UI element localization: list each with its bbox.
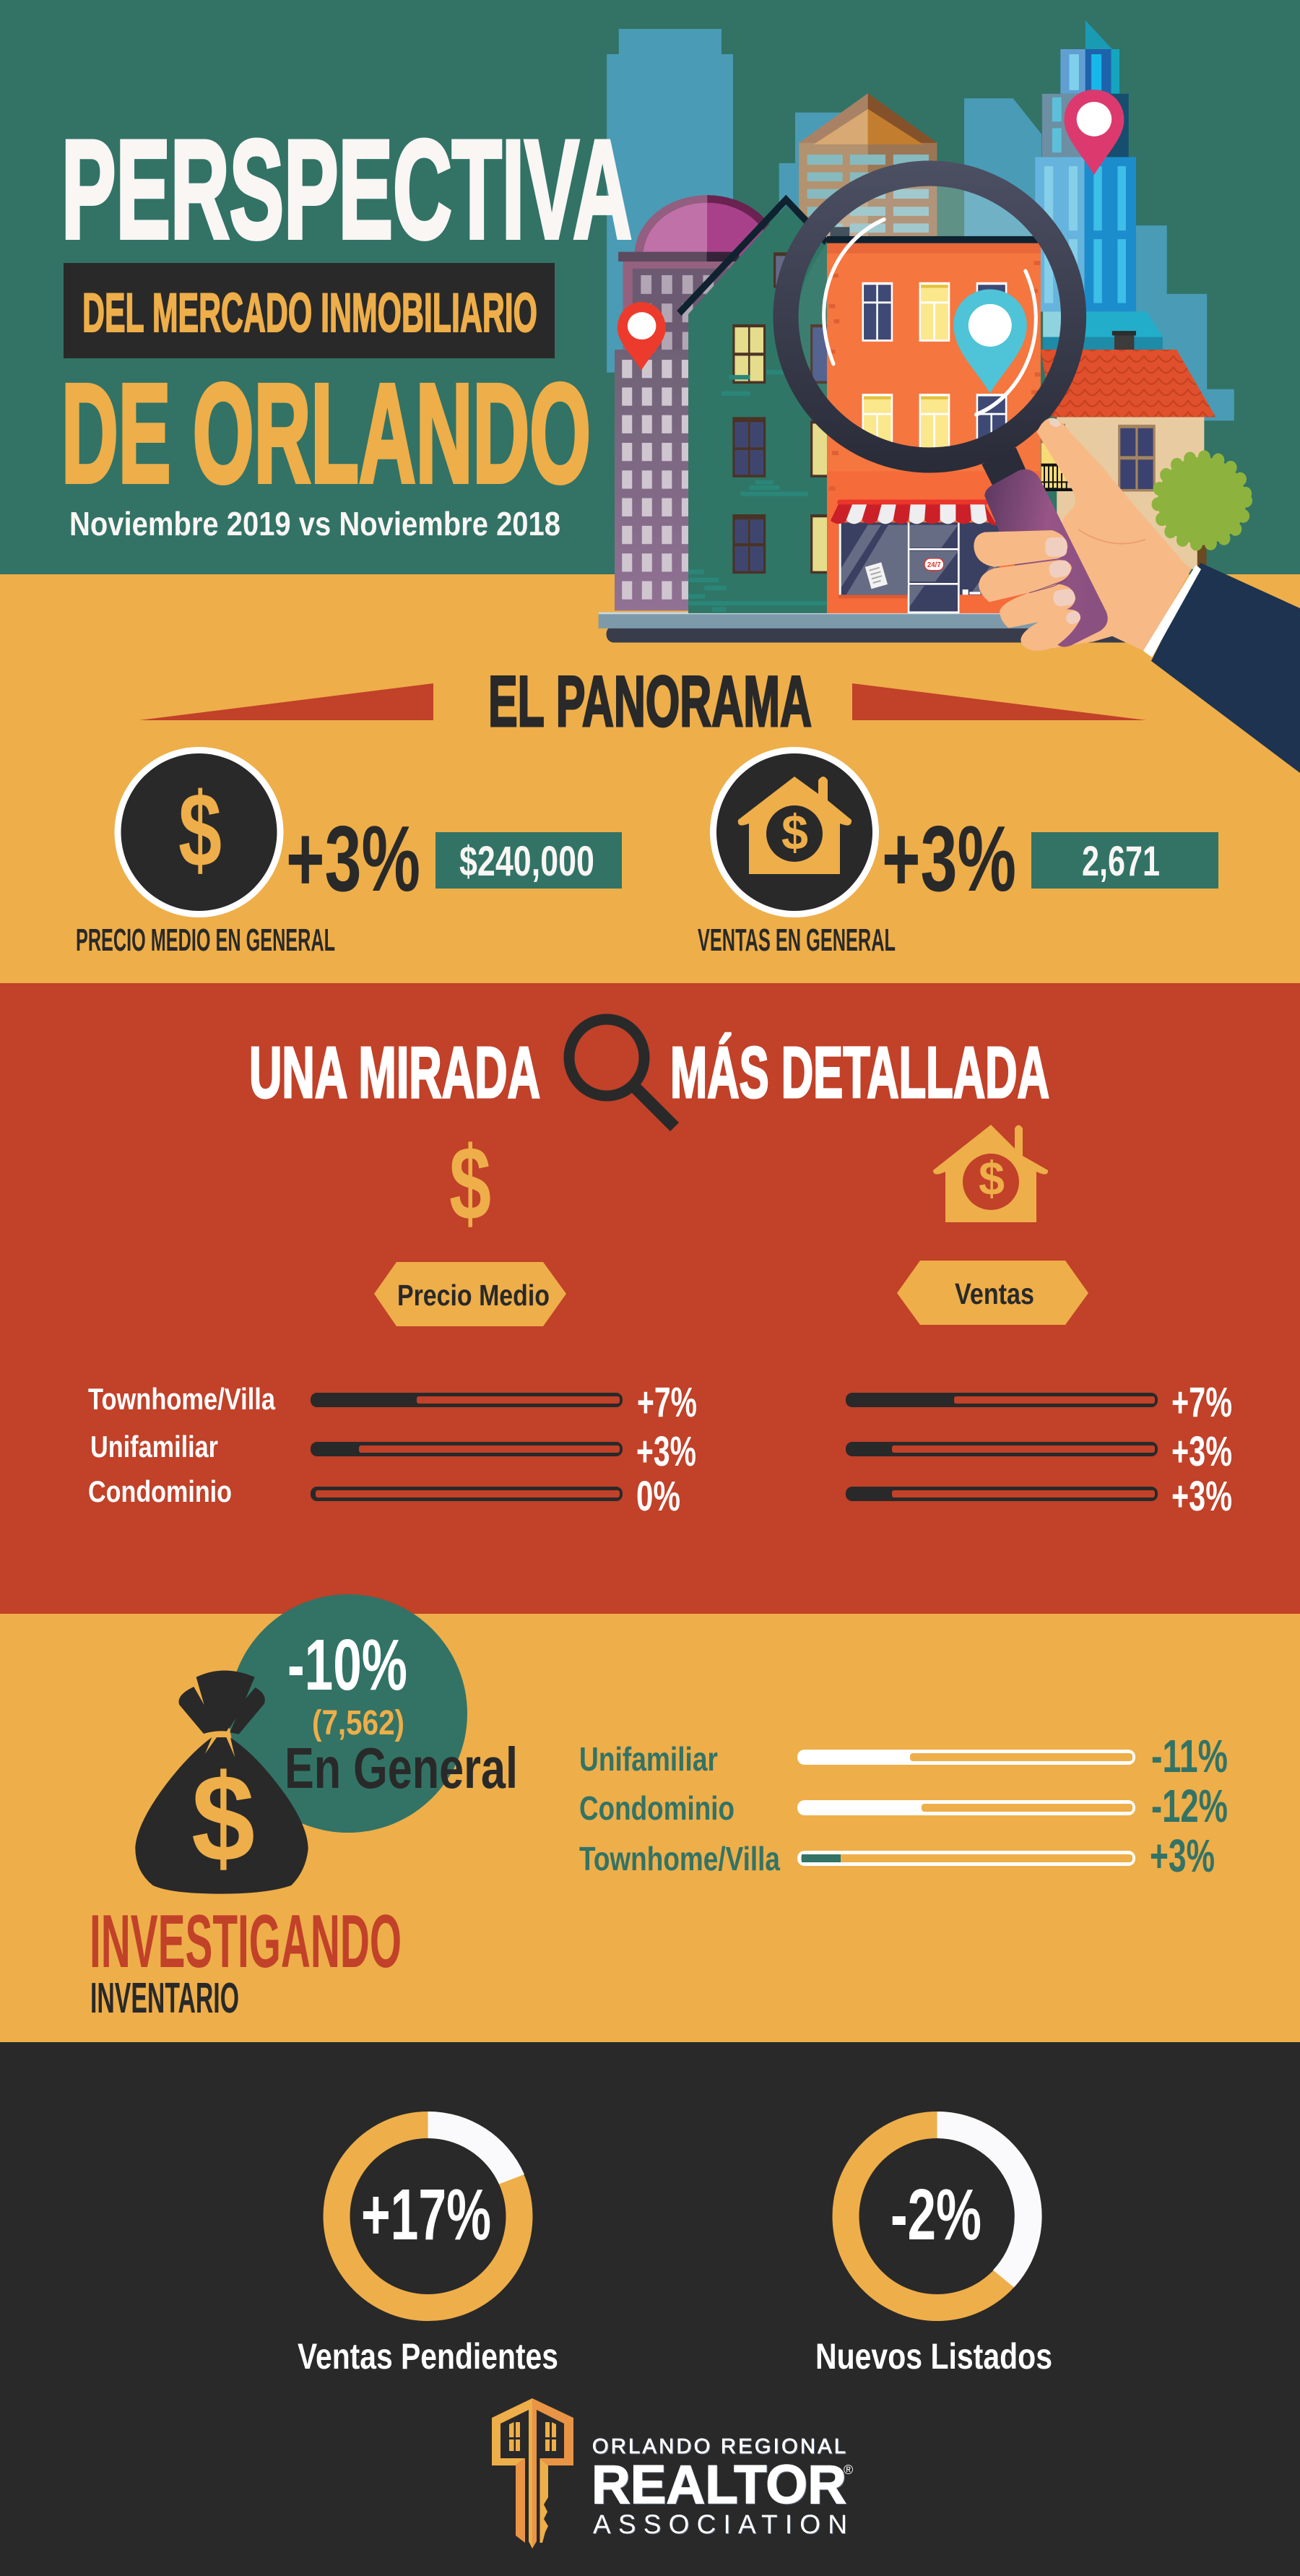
logo: Orlando Regional Realtor Association [492,2398,853,2549]
label: Townhome/Villa: Townhome/Villa [88,1382,276,1416]
icon: dollar circle: $ [178,771,222,889]
green house [679,199,829,613]
tan building with pyramid roof [799,93,937,238]
stat: pending sales: +17% [361,2174,491,2255]
storefront, hand and magnifier grip [831,418,1192,652]
value box: median price: $240,000 [459,838,594,885]
date range: Noviembre 2019 vs Noviembre 2018 [69,505,560,543]
shop awning [831,500,997,525]
magnifier grip [984,470,1108,647]
donut: new listings [846,2112,1042,2307]
value: inventory single family: -11% [1151,1730,1228,1782]
stat: new listings: -2% [890,2174,982,2255]
label: Townhome/Villa: Townhome/Villa [579,1840,780,1877]
tag: Precio Medio [374,1262,566,1326]
map pin: pink [1064,90,1124,175]
label: Unifamiliar: Unifamiliar [579,1740,718,1778]
donut: pending sales [337,2112,524,2307]
heading: Una mirada: UNA MIRADA [249,1032,540,1113]
value box: sales [1031,832,1218,889]
tree [1158,457,1246,570]
bar: inventory condo [797,1800,1135,1815]
logo text: Realtor: REALTOR [592,2454,846,2515]
subtitle banner: DEL MERCADO INMOBILIARIO [82,282,537,344]
value: price condo: 0% [636,1473,680,1520]
icon: money bag: $ [191,1749,255,1888]
magnifier stem [982,447,1026,485]
stat: overall inventory change: -10% [287,1625,407,1706]
label: Condominio: Condominio [88,1474,232,1508]
label: overall: En General [285,1736,518,1800]
magnifier ring [773,160,1086,473]
value: inventory condo: -12% [1151,1780,1228,1832]
bar: price single family [311,1442,623,1456]
logo text: registered mark: ® [844,2463,853,2477]
tag: Ventas [897,1261,1088,1325]
panel: El Panorama [76,661,1218,958]
icon: magnifier [569,1019,675,1127]
map pin: teal [953,290,1027,393]
fingers gripping handle [974,530,1083,651]
balcony and small window behind finger [1041,424,1073,491]
lens tint over green house [798,243,827,400]
label: sales: VENTAS EN GENERAL [698,922,896,958]
document poster [865,562,888,589]
label: Condominio: Condominio [579,1789,734,1827]
shirt cuff [1143,565,1201,657]
value: inventory townhome: +3% [1150,1830,1215,1882]
bar: sales condo [846,1487,1158,1501]
icon: house: $ [979,1151,1005,1205]
bar: inventory single family [797,1750,1135,1765]
icon: house circle: $ [781,805,808,860]
icon: dollar circle [114,747,283,917]
map pin: red [618,302,666,371]
value box: sales: 2,671 [1082,838,1160,885]
heading decoration right [852,683,1146,720]
hero illustration: city and magnifier [599,20,1246,643]
value: inventory count: (7,562) [312,1704,404,1742]
cottage with red roof [1041,331,1216,569]
palm and pointing finger [1037,418,1192,652]
heading decoration left [139,683,433,720]
tag: Precio Medio: Precio Medio [397,1279,550,1312]
overall inventory circle [229,1594,467,1833]
orange brick building [827,227,1041,613]
section background: amber inventory [0,1614,1300,2042]
lens highlights [824,220,1036,415]
palm crease [1078,530,1145,544]
value: sales condo: +3% [1171,1473,1232,1520]
label: median price: PRECIO MEDIO EN GENERAL [76,922,335,958]
open sign 24/7: 24/7 [927,561,941,569]
bar: inventory townhome [797,1851,1135,1866]
icon: money bag [135,1670,308,1894]
title: PERSPECTIVA: PERSPECTIVA [61,111,632,268]
value box: median price [436,832,622,889]
panel: pending sales and new listings [298,2112,1052,2377]
fingernail on pointing finger [1049,418,1061,427]
icon: house key [492,2398,573,2549]
heading: Investigando: INVESTIGANDO [90,1900,402,1984]
section background: teal header [0,0,1300,574]
value: sales townhome: +7% [1171,1379,1232,1426]
subtitle banner [64,263,555,358]
heading: El Panorama: EL PANORAMA [488,661,812,741]
platform base [599,612,1136,643]
blue skyscraper [1035,20,1163,350]
section background: amber overview [0,574,1300,983]
label: Unifamiliar: Unifamiliar [90,1430,218,1464]
label: pending sales: Ventas Pendientes [298,2336,558,2377]
value: price townhome: +7% [637,1379,697,1426]
section background: dark footer [0,2042,1300,2576]
title: DE ORLANDO: DE ORLANDO [61,355,591,512]
bar: price condo [311,1487,623,1501]
stat: sales change: +3% [882,807,1016,911]
panel: inventory [90,1594,1228,2022]
bar: sales single family [846,1442,1158,1456]
value: sales single family: +3% [1171,1428,1232,1475]
purple domed building [615,195,780,610]
panel: Una mirada más detallada [88,1019,1232,1520]
open sign 24/7 [924,558,944,571]
icon: house circle [710,747,879,917]
subheading: Inventario: INVENTARIO [90,1974,239,2022]
background skyline [607,29,1234,420]
tag: Ventas: Ventas [955,1277,1034,1310]
bar: price townhome [311,1393,623,1407]
logo text: Association: ASSOCIATION [593,2510,847,2539]
label: new listings: Nuevos Listados [815,2336,1052,2377]
value: price single family: +3% [636,1428,696,1475]
icon: house [933,1125,1048,1222]
bar: sales townhome [846,1393,1158,1407]
section background: red detail [0,983,1300,1614]
suit sleeve [1151,563,1300,773]
lens glare over sky [818,186,1039,236]
logo text: Orlando Regional: ORLANDO REGIONAL [592,2435,846,2458]
icon: dollar: $ [449,1125,491,1242]
heading: más detallada: MÁS DETALLADA [670,1032,1049,1113]
stat: median price change: +3% [286,807,420,911]
shop windows and door [838,522,999,613]
